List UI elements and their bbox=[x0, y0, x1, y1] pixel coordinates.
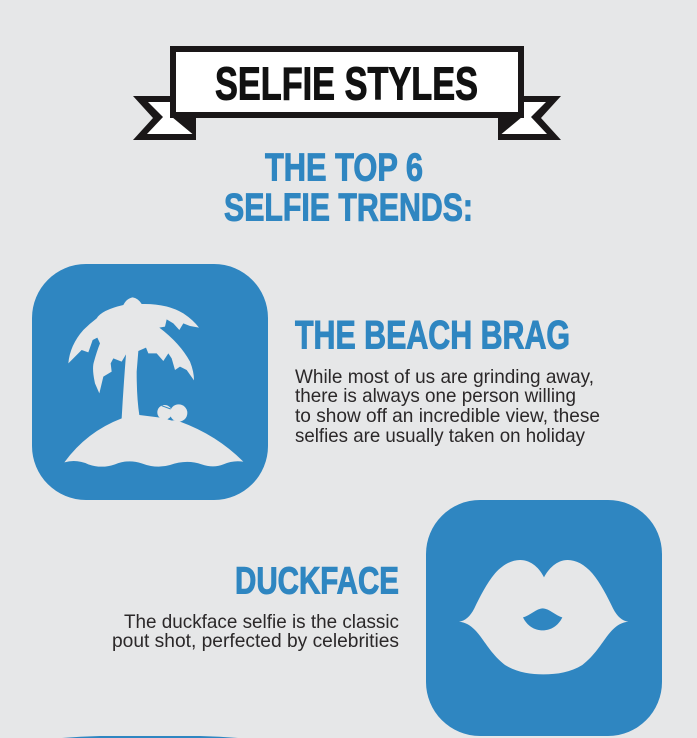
subtitle: SELFIE TRENDS: bbox=[224, 186, 473, 230]
text: beach brag description bbox=[295, 367, 600, 447]
text: beach brag description: selfies are usually taken on holiday bbox=[295, 426, 585, 447]
text: duckface description bbox=[112, 612, 399, 652]
text: beach brag description: there is always one person willing bbox=[295, 386, 576, 407]
icon: next panel top edge bbox=[62, 736, 238, 738]
heading: the beach brag: THE BEACH BRAG bbox=[295, 314, 570, 358]
banner title: SELFIE STYLES bbox=[215, 58, 478, 110]
subtitle: THE TOP 6 bbox=[265, 146, 423, 190]
icon: palm tree island bbox=[32, 264, 268, 500]
icon: lips bbox=[426, 500, 662, 736]
text: beach brag description: While most of us are grinding away, bbox=[295, 367, 594, 388]
text: duckface description: The duckface selfie is the classic bbox=[124, 612, 399, 633]
text: beach brag description: to show off an incredible view, these bbox=[295, 406, 600, 427]
heading: duckface: DUCKFACE bbox=[235, 560, 399, 602]
text: duckface description: pout shot, perfected by celebrities bbox=[112, 631, 399, 652]
subtitle bbox=[224, 146, 473, 230]
banner: selfie styles bbox=[133, 49, 561, 140]
